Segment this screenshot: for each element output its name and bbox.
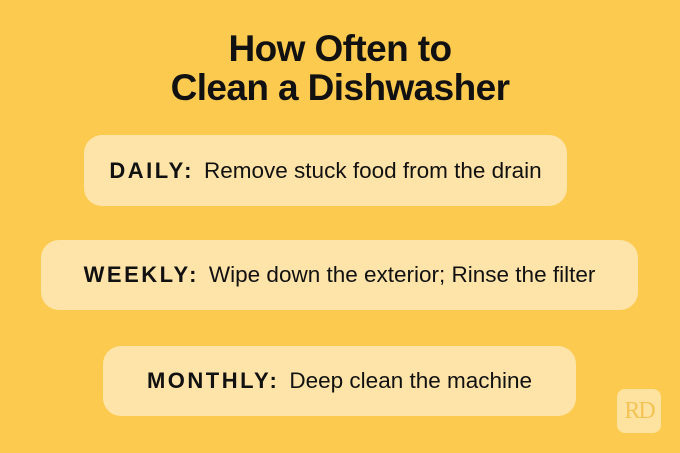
panel: daily: Remove stuck food from the drain: [204, 158, 542, 182]
panel: weekly: WEEKLY:: [84, 262, 199, 287]
panel: monthly: MONTHLY:: [147, 368, 279, 393]
icon: RD logo: [617, 389, 661, 433]
title: Clean a Dishwasher: [171, 67, 509, 108]
panel: monthly: Deep clean the machine: [289, 368, 532, 393]
title: How Often to: [228, 28, 451, 69]
panel: weekly: [41, 240, 638, 310]
panel: daily: [84, 135, 567, 206]
title: [171, 28, 510, 108]
icon: RD logo: RD: [624, 398, 654, 424]
panel: monthly: [103, 346, 576, 416]
panel: weekly: Wipe down the exterior; Rinse the filter: [209, 262, 595, 287]
panel: daily: DAILY:: [109, 158, 194, 182]
